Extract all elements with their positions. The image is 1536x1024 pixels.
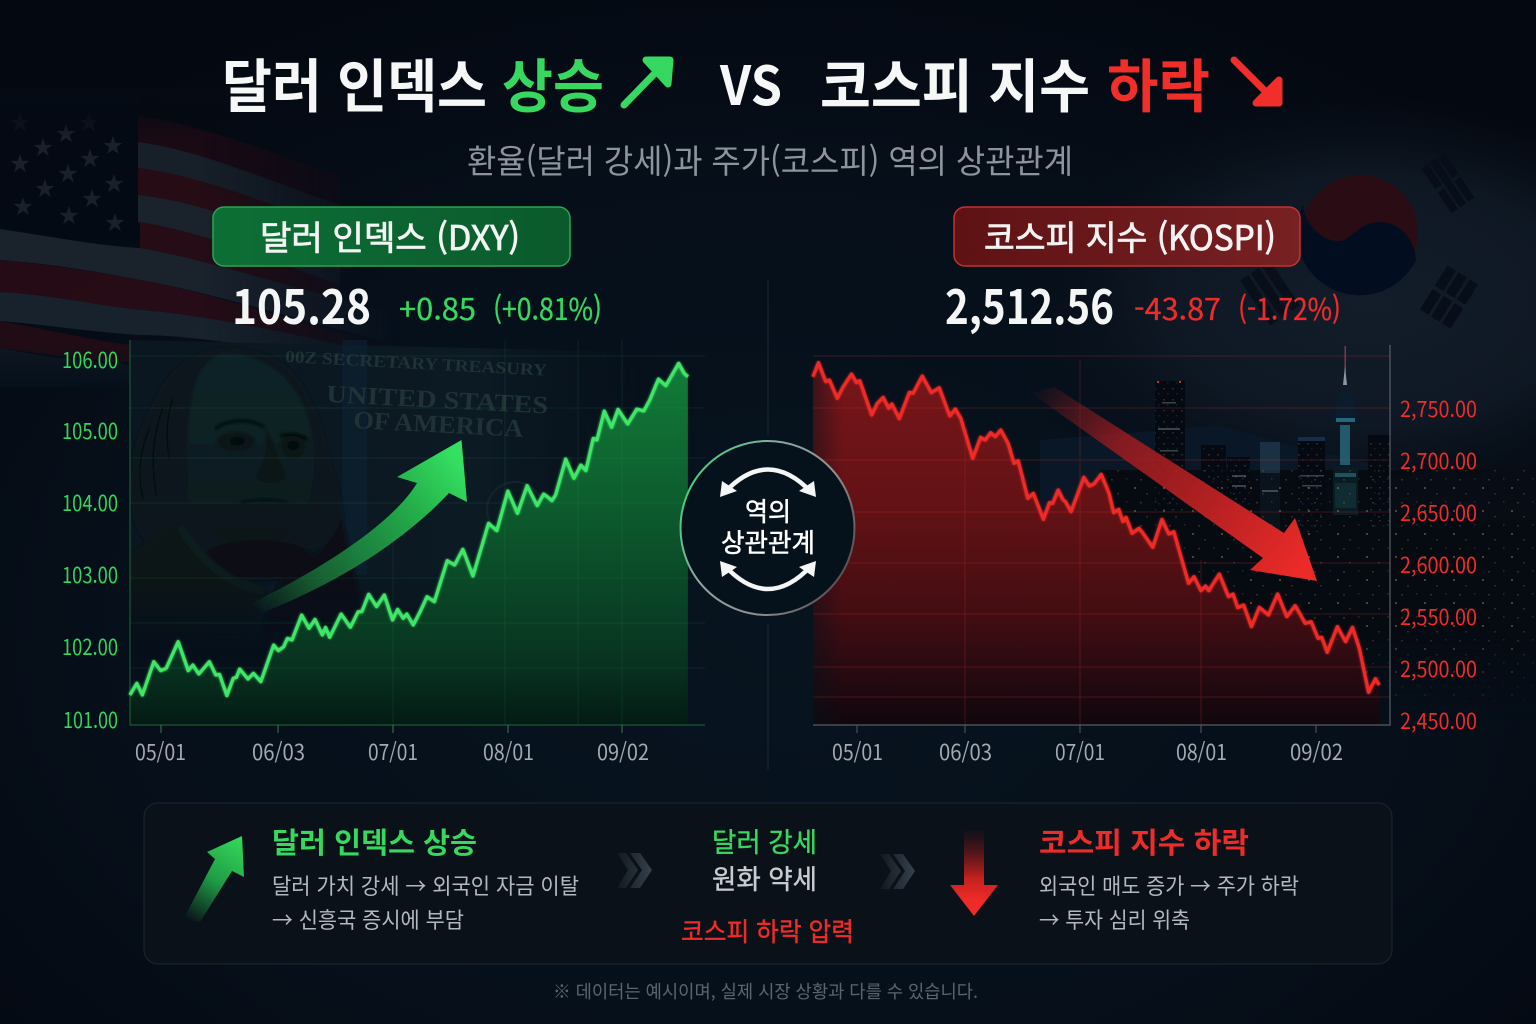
x axis labels: 06/03 bbox=[939, 735, 992, 767]
bill lettering: OF AMERICA bbox=[353, 407, 524, 443]
arrow: big red downward bbox=[1031, 387, 1317, 581]
y axis labels: 2,700.00 bbox=[1400, 444, 1477, 476]
x axis labels: 09/02 bbox=[1290, 735, 1343, 767]
x axis labels bbox=[135, 735, 649, 767]
flag stars bbox=[9, 109, 126, 237]
area bbox=[130, 363, 688, 725]
value: KOSPI bbox=[945, 269, 1341, 338]
title: 상승 bbox=[502, 40, 604, 124]
x axis labels: 09/02 bbox=[597, 735, 649, 767]
text: mechanism: 코스피 하락 압력 bbox=[681, 912, 854, 949]
chart: KOSPI (red) bbox=[813, 345, 1477, 767]
flag stars: ★ bbox=[79, 145, 101, 173]
badge: DXY: 달러 인덱스 (DXY) bbox=[260, 211, 520, 260]
flag stars: ★ bbox=[78, 109, 100, 137]
background: Seoul skyline bbox=[1040, 346, 1536, 720]
x axis labels: 08/01 bbox=[483, 735, 534, 767]
value: KOSPI: (-1.72%) bbox=[1238, 285, 1341, 329]
icon: chevrons 1 bbox=[617, 853, 652, 888]
icon: green up arrow bbox=[624, 60, 670, 105]
center badge: inverse correlation: 상관관계 bbox=[721, 523, 815, 560]
icon: red down arrow bbox=[1234, 60, 1279, 103]
x axis labels: 07/01 bbox=[1055, 735, 1105, 767]
center badge: inverse correlation: 역의 bbox=[745, 492, 791, 529]
x axis labels bbox=[832, 735, 1343, 767]
portrait bbox=[130, 351, 361, 604]
flag stars: ★ bbox=[32, 134, 54, 162]
bill lettering: 00Z SECRETARY TREASURY bbox=[285, 347, 547, 380]
background: dollar bill with portrait bbox=[130, 340, 547, 594]
flag stars: ★ bbox=[102, 132, 124, 160]
y axis labels: 104.00 bbox=[62, 486, 118, 518]
y axis labels: 105.00 bbox=[62, 414, 118, 446]
arrow: big green upward bbox=[252, 440, 467, 613]
y axis labels: 2,500.00 bbox=[1400, 652, 1477, 684]
flag stars: ★ bbox=[104, 209, 126, 237]
text: KOSPI fall: 외국인 매도 증가 → 주가 하락 bbox=[1039, 869, 1299, 901]
panel: summary bbox=[144, 803, 1392, 964]
chart: DXY (green) bbox=[62, 340, 705, 767]
flag stars: ★ bbox=[55, 120, 77, 148]
y axis labels: 106.00 bbox=[62, 343, 118, 375]
title: 달러 인덱스 bbox=[222, 40, 487, 124]
y axis labels: 103.00 bbox=[62, 558, 118, 590]
line bbox=[813, 363, 1379, 692]
y axis labels: 2,750.00 bbox=[1400, 392, 1477, 424]
text: KOSPI fall bbox=[1039, 820, 1299, 935]
value: DXY: 105.28 bbox=[232, 269, 371, 338]
flag stars: ★ bbox=[58, 202, 80, 230]
text: mechanism bbox=[681, 821, 854, 949]
y axis labels: 2,450.00 bbox=[1400, 704, 1477, 736]
flag stars: ★ bbox=[9, 150, 31, 178]
title: VS bbox=[719, 42, 782, 121]
text: dollar rise: 달러 인덱스 상승 bbox=[272, 820, 477, 862]
flag stars: ★ bbox=[9, 109, 31, 137]
text: dollar rise bbox=[272, 820, 579, 935]
title: 하락 bbox=[1107, 40, 1210, 124]
value: DXY: (+0.81%) bbox=[493, 285, 602, 329]
y axis labels: 101.00 bbox=[63, 703, 118, 735]
text: KOSPI fall: 코스피 지수 하락 bbox=[1039, 820, 1249, 862]
background: Korean flag bbox=[1030, 95, 1536, 505]
icon: chevrons 2 bbox=[880, 854, 915, 889]
center badge: inverse correlation bbox=[680, 441, 854, 615]
y axis labels bbox=[1400, 392, 1477, 736]
bill lettering: UNITED STATES bbox=[326, 381, 549, 420]
y axis labels: 102.00 bbox=[62, 630, 118, 662]
bill lettering bbox=[286, 351, 547, 437]
x axis labels: 05/01 bbox=[135, 735, 186, 767]
value: KOSPI: 2,512.56 bbox=[945, 269, 1114, 338]
value: KOSPI: -43.87 bbox=[1134, 285, 1221, 329]
y axis labels: 2,550.00 bbox=[1400, 600, 1477, 632]
icon: bottom double arrow bbox=[725, 566, 811, 589]
title: 코스피 지수 bbox=[820, 40, 1090, 124]
text: KOSPI fall: → 투자 심리 위축 bbox=[1039, 903, 1190, 935]
x axis labels: 08/01 bbox=[1176, 735, 1227, 767]
y axis labels bbox=[62, 343, 118, 735]
grid bbox=[813, 356, 1390, 725]
flag stars: ★ bbox=[81, 185, 103, 213]
flag stars: ★ bbox=[34, 175, 56, 203]
text: dollar rise: → 신흥국 증시에 부담 bbox=[272, 903, 464, 935]
area bbox=[813, 363, 1379, 725]
line bbox=[130, 363, 688, 696]
icon: red down arrow bbox=[950, 830, 998, 916]
subtitle: 환율(달러 강세)과 주가(코스피) 역의 상관관계 bbox=[467, 135, 1073, 183]
value: DXY bbox=[232, 269, 602, 338]
icon: top double arrow bbox=[725, 470, 811, 492]
y axis labels: 2,600.00 bbox=[1400, 548, 1477, 580]
title bbox=[222, 40, 1279, 124]
y axis labels: 2,650.00 bbox=[1400, 496, 1477, 528]
grid bbox=[130, 340, 705, 725]
value: DXY: +0.85 bbox=[399, 285, 476, 329]
center divider line bbox=[767, 280, 769, 770]
text: mechanism: 달러 강세 bbox=[712, 821, 817, 860]
x axis labels: 07/01 bbox=[368, 735, 418, 767]
flag stars: ★ bbox=[12, 193, 34, 221]
x axis labels: 05/01 bbox=[832, 735, 883, 767]
text: dollar rise: 달러 가치 강세 → 외국인 자금 이탈 bbox=[272, 869, 579, 901]
N Seoul Tower bbox=[1333, 346, 1358, 515]
flag stars: ★ bbox=[57, 160, 79, 188]
badge: DXY bbox=[213, 207, 570, 266]
icon: green arrow bbox=[184, 836, 244, 922]
text: mechanism: 원화 약세 bbox=[712, 858, 817, 897]
x axis labels: 06/03 bbox=[252, 735, 305, 767]
footnote: ※ 데이터는 예시이며, 실제 시장 상황과 다를 수 있습니다. bbox=[553, 978, 978, 1004]
flag stars: ★ bbox=[103, 170, 125, 198]
background: US flag bbox=[0, 115, 346, 368]
badge: KOSPI: 코스피 지수 (KOSPI) bbox=[984, 211, 1276, 260]
